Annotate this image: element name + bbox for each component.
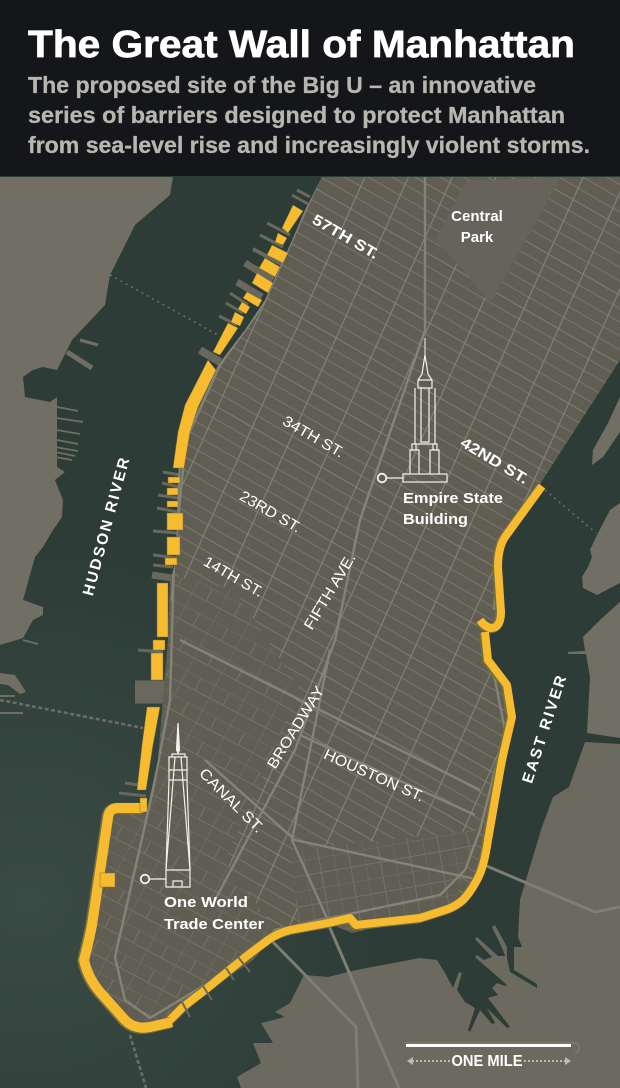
wall outline battery [83, 808, 171, 1028]
Manhattan street grid [78, 177, 620, 1024]
major roads [115, 177, 505, 1018]
subtitle: from sea-level rise and increasingly violent storms. [28, 132, 590, 158]
label: 42nd St: 42ND ST. [457, 434, 531, 488]
lower Manhattan street grid [91, 576, 298, 1022]
Manhattan bridge [292, 840, 399, 1088]
label: Empire State Building: Empire State [403, 490, 503, 507]
Brooklyn bridge [269, 938, 358, 1088]
label: One World Trade Center: One World [164, 894, 248, 911]
New Jersey fragments [0, 673, 26, 714]
wall ticks [182, 957, 250, 1017]
label: Empire State Building [403, 490, 503, 528]
west side piers [119, 190, 310, 796]
title: The Great Wall of Manhattan [28, 24, 575, 66]
label: 14th St: 14TH ST. [200, 553, 266, 601]
scale bar: one mile: ONE MILE [452, 1053, 522, 1070]
New Jersey land [0, 177, 173, 645]
subtitle: series of barriers designed to protect Manhattan [28, 102, 565, 128]
east village street grid [290, 830, 480, 935]
subtitle [28, 72, 590, 158]
tunnels [0, 275, 596, 1088]
label: 57th St: 57TH ST. [309, 211, 382, 263]
label: Broadway: BROADWAY [264, 683, 328, 772]
header bar [0, 0, 620, 176]
label: 34th St: 34TH ST. [280, 413, 347, 461]
label: Houston St: HOUSTON ST. [321, 746, 427, 806]
label: 23rd St: 23RD ST. [237, 488, 304, 536]
Queens and Roosevelt Island [568, 397, 620, 738]
label: Hudson River: HUDSON RIVER [80, 456, 133, 598]
wall outline east [169, 486, 541, 1020]
label: Central Park: Park [461, 229, 494, 246]
central park [435, 177, 561, 303]
wall fill battery [84, 808, 172, 1028]
label: One World Trade Center: Trade Center [164, 916, 264, 933]
New Jersey piers [23, 340, 98, 644]
label: Fifth Ave: FIFTH AVE. [301, 550, 360, 633]
scale bar: one mile [404, 1043, 579, 1070]
Big U wall [83, 486, 542, 1028]
label: East River: EAST RIVER [519, 674, 570, 785]
label: Central Park [451, 208, 503, 246]
Brooklyn [237, 742, 620, 1088]
label: One World Trade Center [164, 894, 264, 933]
Williamsburg bridge [463, 856, 620, 912]
wall fill east [170, 486, 542, 1020]
icon: Empire State Building [378, 338, 447, 482]
midtown wall segments [100, 205, 303, 887]
subtitle: The proposed site of the Big U – an innovative [28, 72, 536, 98]
label: Canal St: CANAL ST. [195, 765, 267, 837]
icon: One World Trade Center [141, 723, 190, 887]
label: Empire State Building: Building [403, 511, 468, 528]
label: Central Park: Central [451, 208, 503, 225]
